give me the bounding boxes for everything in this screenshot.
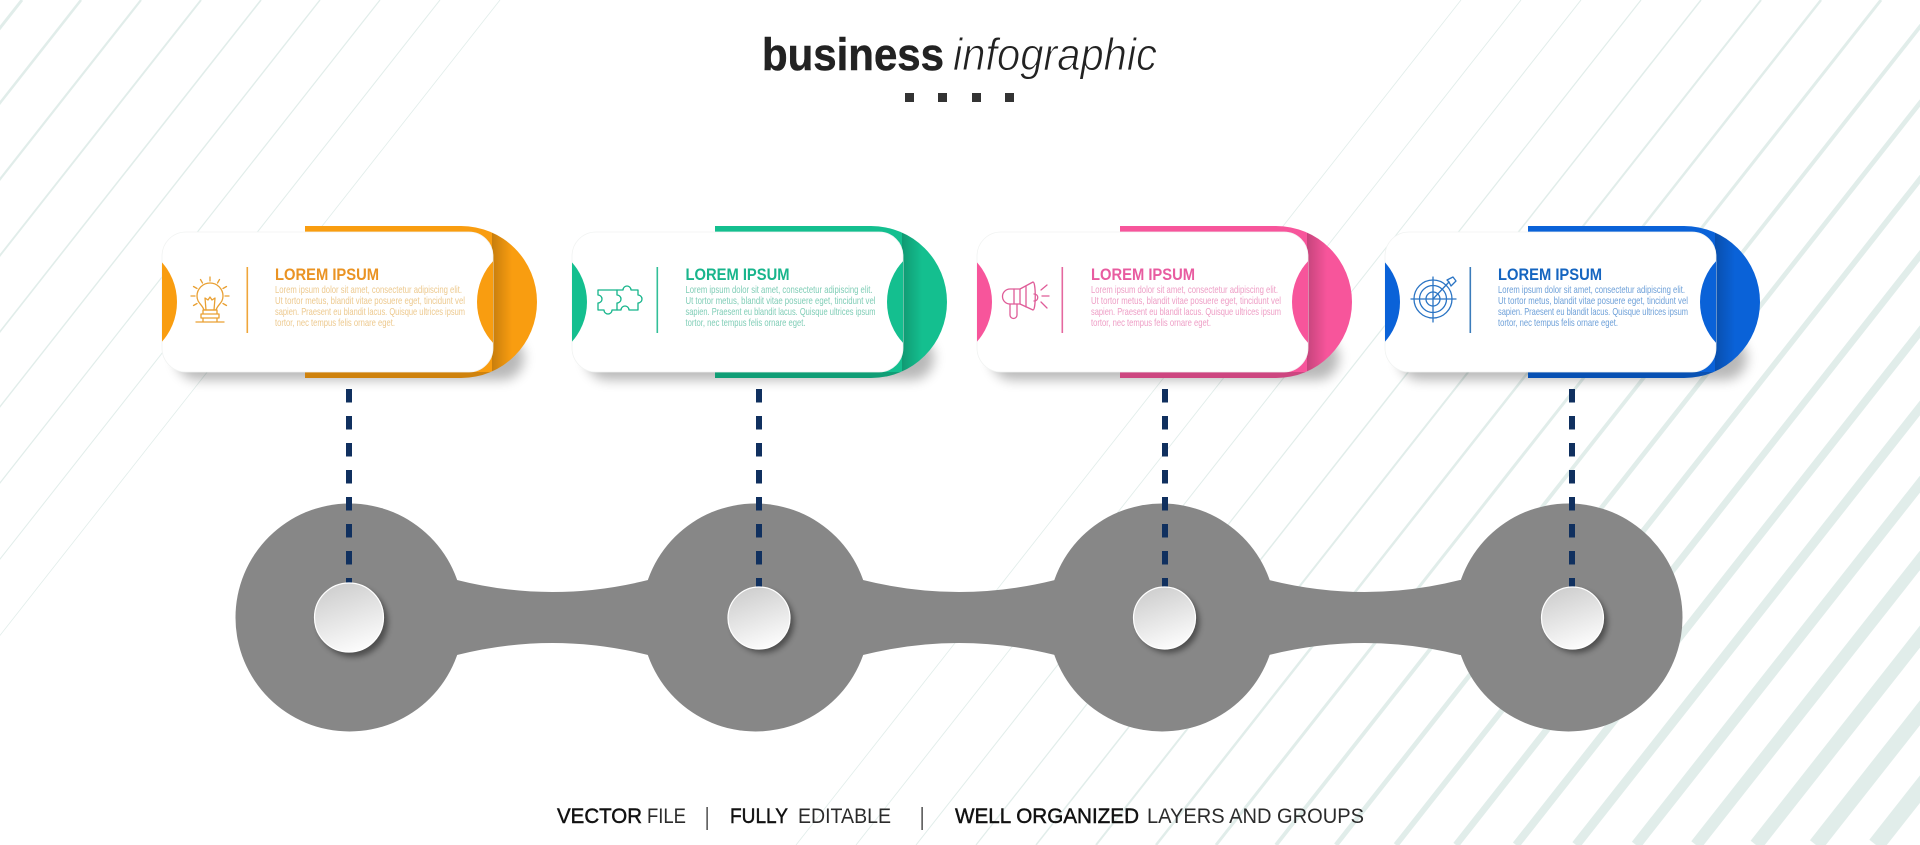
- text: orange heading and body: sapien. Praesent eu blandit lacus. Quisque ultrices ipsum: [275, 307, 465, 318]
- text: pink heading and body: Ut tortor metus, blandit vitae posuere eget, tincidunt vel: [1091, 296, 1281, 307]
- text: orange heading and body: tortor, nec tempus felis ornare eget.: [275, 318, 395, 329]
- text: pink heading and body: sapien. Praesent eu blandit lacus. Quisque ultrices ipsum: [1091, 307, 1281, 318]
- timeline node 2: [728, 587, 794, 653]
- text: pink heading and body: LOREM IPSUM: [1091, 266, 1195, 284]
- footer caption: LAYERS AND GROUPS: [1147, 805, 1364, 828]
- panel: pink card: [976, 226, 1352, 387]
- timeline node 1: [314, 583, 388, 657]
- footer caption: EDITABLE: [798, 805, 891, 828]
- panel: blue card: [1384, 226, 1760, 387]
- panel: green card: [572, 226, 947, 387]
- timeline node 4: [1542, 587, 1608, 653]
- title dots: [905, 93, 1014, 102]
- icon: puzzle pieces: [598, 286, 642, 314]
- text: blue heading and body: Ut tortor metus, blandit vitae posuere eget, tincidunt vel: [1498, 296, 1688, 307]
- panel: orange card: [162, 226, 537, 387]
- gray timeline track: [236, 504, 1682, 732]
- text: orange heading and body: [275, 266, 465, 329]
- text: blue heading and body: LOREM IPSUM: [1498, 266, 1602, 284]
- icon: light bulb: [191, 277, 229, 322]
- text: blue heading and body: tortor, nec tempus felis ornare eget.: [1498, 318, 1618, 329]
- text: orange heading and body: LOREM IPSUM: [275, 266, 379, 284]
- text: green heading and body: Lorem ipsum dolor sit amet, consectetur adipiscing elit.: [686, 285, 872, 296]
- footer caption: VECTOR: [557, 805, 642, 828]
- timeline node 3: [1134, 587, 1200, 653]
- footer caption: WELL ORGANIZED: [955, 805, 1139, 828]
- text: blue heading and body: [1498, 266, 1688, 329]
- text: pink heading and body: tortor, nec tempus felis ornare eget.: [1091, 318, 1211, 329]
- text: pink heading and body: [1091, 266, 1281, 329]
- dashed connectors: [349, 389, 1572, 590]
- title: business: [762, 29, 944, 80]
- text: green heading and body: Ut tortor metus, blandit vitae posuere eget, tincidunt vel: [686, 296, 876, 307]
- icon: megaphone: [1002, 282, 1049, 318]
- footer caption: [557, 805, 1364, 830]
- icon: target with arrow: [1411, 277, 1456, 322]
- footer caption: FILE: [647, 805, 686, 828]
- text: orange heading and body: Lorem ipsum dolor sit amet, consectetur adipiscing elit.: [275, 285, 462, 296]
- title: [762, 29, 1157, 80]
- title: infographic: [953, 29, 1157, 80]
- text: green heading and body: [686, 266, 876, 329]
- text: green heading and body: sapien. Praesent eu blandit lacus. Quisque ultrices ipsum: [686, 307, 876, 318]
- text: green heading and body: tortor, nec tempus felis ornare eget.: [686, 318, 806, 329]
- text: blue heading and body: Lorem ipsum dolor sit amet, consectetur adipiscing elit.: [1498, 285, 1685, 296]
- text: green heading and body: LOREM IPSUM: [686, 266, 790, 284]
- text: orange heading and body: Ut tortor metus, blandit vitae posuere eget, tincidunt vel: [275, 296, 465, 307]
- text: blue heading and body: sapien. Praesent eu blandit lacus. Quisque ultrices ipsum: [1498, 307, 1688, 318]
- footer caption: FULLY: [730, 805, 788, 828]
- text: pink heading and body: Lorem ipsum dolor sit amet, consectetur adipiscing elit.: [1091, 285, 1278, 296]
